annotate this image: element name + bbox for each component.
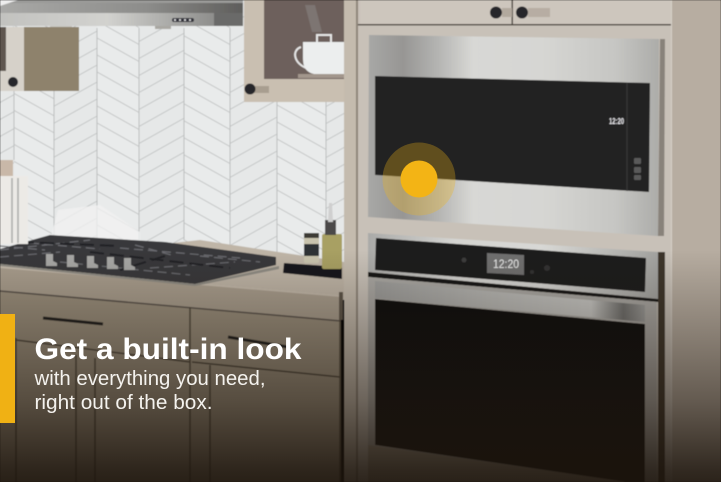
- white pot: [295, 35, 345, 78]
- black microwave door: [375, 76, 650, 192]
- marker dot: [400, 160, 438, 198]
- cutting boards: [0, 160, 28, 244]
- wall oven: [368, 233, 665, 482]
- hotspot marker: [382, 142, 456, 216]
- microwave buttons: [634, 158, 641, 180]
- drawer pull left: [43, 318, 103, 324]
- cabinet knob: [244, 84, 269, 94]
- stainless microwave frame: [658, 39, 665, 236]
- upper door pair: [358, 0, 671, 26]
- oven display: 12:20: [493, 259, 519, 271]
- marker halo: [382, 142, 456, 216]
- counter tray with oil and jar: [283, 203, 342, 279]
- headline: Get a built-in look: [34, 333, 302, 366]
- subheading: right out of the box.: [34, 392, 212, 414]
- upper left cabinet: [0, 27, 79, 91]
- oven display: [487, 253, 524, 275]
- base cabinets: [0, 291, 341, 482]
- microwave clock display: 12:20: [609, 117, 624, 126]
- cooktop knobs: [46, 254, 135, 270]
- range hood: [0, 0, 243, 29]
- drawer pull right: [228, 337, 288, 347]
- yellow accent bar: [0, 314, 15, 423]
- gas cooktop: [0, 235, 279, 286]
- countertop: [0, 240, 344, 321]
- oven door: [368, 277, 657, 482]
- dark gradient overlay: [0, 250, 721, 482]
- oven control panel: [368, 233, 658, 299]
- tall cabinet column: [344, 0, 721, 482]
- tile backsplash: [0, 0, 346, 300]
- microwave: [368, 35, 665, 236]
- subheading: [33, 368, 266, 414]
- upper right glass cabinet: [244, 0, 345, 102]
- subheading: with everything you need,: [33, 368, 266, 390]
